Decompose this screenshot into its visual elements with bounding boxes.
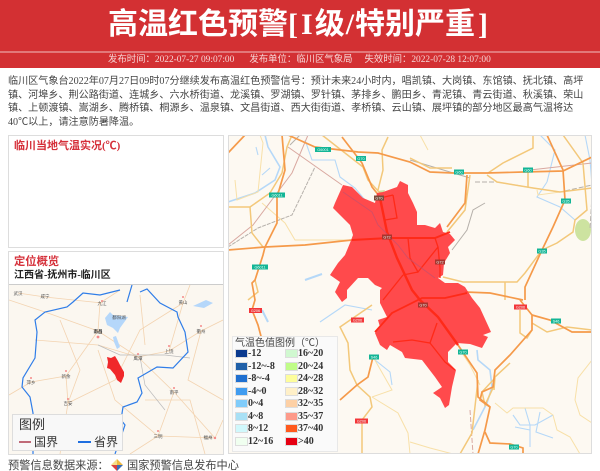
legend right column: 35~37 bbox=[298, 411, 323, 422]
highway shields: S46 bbox=[553, 320, 559, 324]
locator map: 南平 bbox=[170, 389, 179, 396]
highway shields bbox=[249, 147, 571, 450]
highway shields: G35 bbox=[538, 250, 546, 254]
legend right column: 20~24 bbox=[298, 361, 323, 372]
legend left column: 0~4 bbox=[248, 398, 263, 409]
legend right column: 32~35 bbox=[298, 398, 323, 409]
locator map: 上饶 bbox=[164, 348, 174, 355]
locator map: 咸宁 bbox=[40, 293, 50, 300]
legend left column: 8~12 bbox=[248, 423, 268, 434]
legend right column: >40 bbox=[298, 436, 314, 447]
highlighted district bbox=[107, 356, 124, 383]
province border key: 省界 bbox=[94, 435, 118, 449]
title: 高温红色预警[I级/特别严重] bbox=[108, 8, 488, 41]
secondary roads bbox=[228, 135, 592, 454]
locator map: 吉安 bbox=[64, 400, 73, 407]
heading: location overview: 定位概览 bbox=[14, 256, 59, 268]
highway shields: G35 bbox=[562, 200, 570, 204]
highway shields: G70 bbox=[459, 350, 467, 354]
heading: local temperature: 临川当地气温实况(℃) bbox=[14, 140, 120, 152]
icon: warning center logo bbox=[111, 459, 123, 471]
locator map: 鄱阳湖 bbox=[112, 314, 126, 321]
legend left column: -8~-4 bbox=[248, 373, 270, 384]
location path: 江西省-抚州市-临川区 bbox=[14, 270, 111, 281]
pale roads bbox=[235, 135, 592, 454]
locator map: 三明 bbox=[154, 434, 163, 440]
lake bbox=[105, 300, 213, 349]
legend left column: -4~0 bbox=[248, 386, 267, 397]
highway shields: G60 bbox=[455, 170, 463, 174]
highway shields: G70 bbox=[357, 157, 365, 161]
legend left column: 4~8 bbox=[248, 411, 263, 422]
highway shields: G206 bbox=[357, 420, 366, 424]
header divider stripe bbox=[0, 51, 600, 53]
legend right column: 37~40 bbox=[298, 423, 323, 434]
warning description text bbox=[8, 75, 583, 128]
locator map: 武汉 bbox=[14, 290, 23, 297]
national border key: 国界 bbox=[34, 435, 58, 449]
locator map bbox=[9, 284, 223, 454]
highway shields: G206 bbox=[251, 309, 260, 313]
highway shields: G6001 bbox=[317, 148, 329, 152]
highway shields: G6011 bbox=[254, 266, 266, 270]
legend left column: -12~-8 bbox=[248, 361, 275, 372]
legend right column: 28~32 bbox=[298, 386, 323, 397]
highway shields: G60 bbox=[524, 168, 532, 172]
highway shields: G72 bbox=[383, 236, 391, 240]
locator map: 衢州 bbox=[196, 328, 206, 335]
locator map: 南昌 bbox=[94, 328, 103, 335]
legend right column: 16~20 bbox=[298, 348, 323, 359]
highway shields: S46 bbox=[371, 356, 377, 360]
legend title: 图例 bbox=[19, 417, 45, 432]
panel: local temperature bbox=[8, 135, 224, 248]
locator map: 福州 bbox=[204, 434, 213, 441]
legend title: 气温色值图例（℃） bbox=[235, 338, 325, 349]
highways bbox=[228, 135, 592, 454]
data source footer bbox=[8, 459, 239, 471]
legend left column: -12 bbox=[248, 348, 261, 359]
header banner bbox=[0, 0, 600, 68]
panel: warning area map bbox=[228, 135, 592, 454]
warning description text: 临川区气象台2022年07月27日09时07分继续发布高温红色预警信号：预计未来24小时内，唱凯镇、大岗镇、东馆镇、抚北镇、高坪 bbox=[8, 76, 583, 87]
locator map: 黄山 bbox=[178, 299, 188, 306]
issue information line: 发布时间：2022-07-27 09:07:00 发布单位：临川区气象局 失效时间：2022-07-28 12:07:00 bbox=[108, 55, 491, 65]
legend left column bbox=[235, 348, 275, 447]
highway shields: G6011 bbox=[271, 194, 283, 198]
warning description text: 40℃以上，请注意防暑降温。 bbox=[8, 116, 139, 128]
locator map: 鹰潭 bbox=[134, 355, 143, 362]
legend right column bbox=[285, 348, 324, 447]
locator map: 新余 bbox=[62, 373, 71, 380]
highway shields: G206 bbox=[516, 306, 525, 310]
locator map: 九江 bbox=[98, 300, 107, 307]
locator map legend bbox=[12, 414, 123, 451]
province boundary bbox=[22, 285, 188, 454]
warning area bbox=[330, 181, 491, 408]
highway shields: G70 bbox=[375, 196, 383, 200]
rivers and lakes bbox=[228, 135, 592, 447]
highway shields: G70 bbox=[510, 446, 518, 450]
highway shields: G72 bbox=[436, 260, 444, 264]
green patch bbox=[575, 219, 591, 241]
locator map: 萍乡 bbox=[26, 379, 36, 386]
highway shields: G206 bbox=[353, 318, 362, 322]
rail lines bbox=[228, 135, 592, 250]
internal roads bbox=[352, 195, 467, 370]
temperature legend bbox=[232, 336, 338, 452]
panel: location overview bbox=[8, 251, 224, 455]
legend right column: 24~28 bbox=[298, 373, 323, 384]
highway shields: G70 bbox=[419, 304, 427, 308]
warning description text: 镇、上顿渡镇、嵩湖乡、腾桥镇、桐源乡、温泉镇、文昌街道、西大街街道、孝桥镇、云山镇、展坪镇的部分地区最高气温将达 bbox=[8, 103, 573, 114]
warning description text: 镇、河埠乡、荆公路街道、连城乡、六水桥街道、龙溪镇、罗湖镇、罗针镇、茅排乡、鹏田乡、青泥镇、青云街道、秋溪镇、荣山 bbox=[8, 90, 583, 100]
legend left column: 12~16 bbox=[248, 436, 273, 447]
